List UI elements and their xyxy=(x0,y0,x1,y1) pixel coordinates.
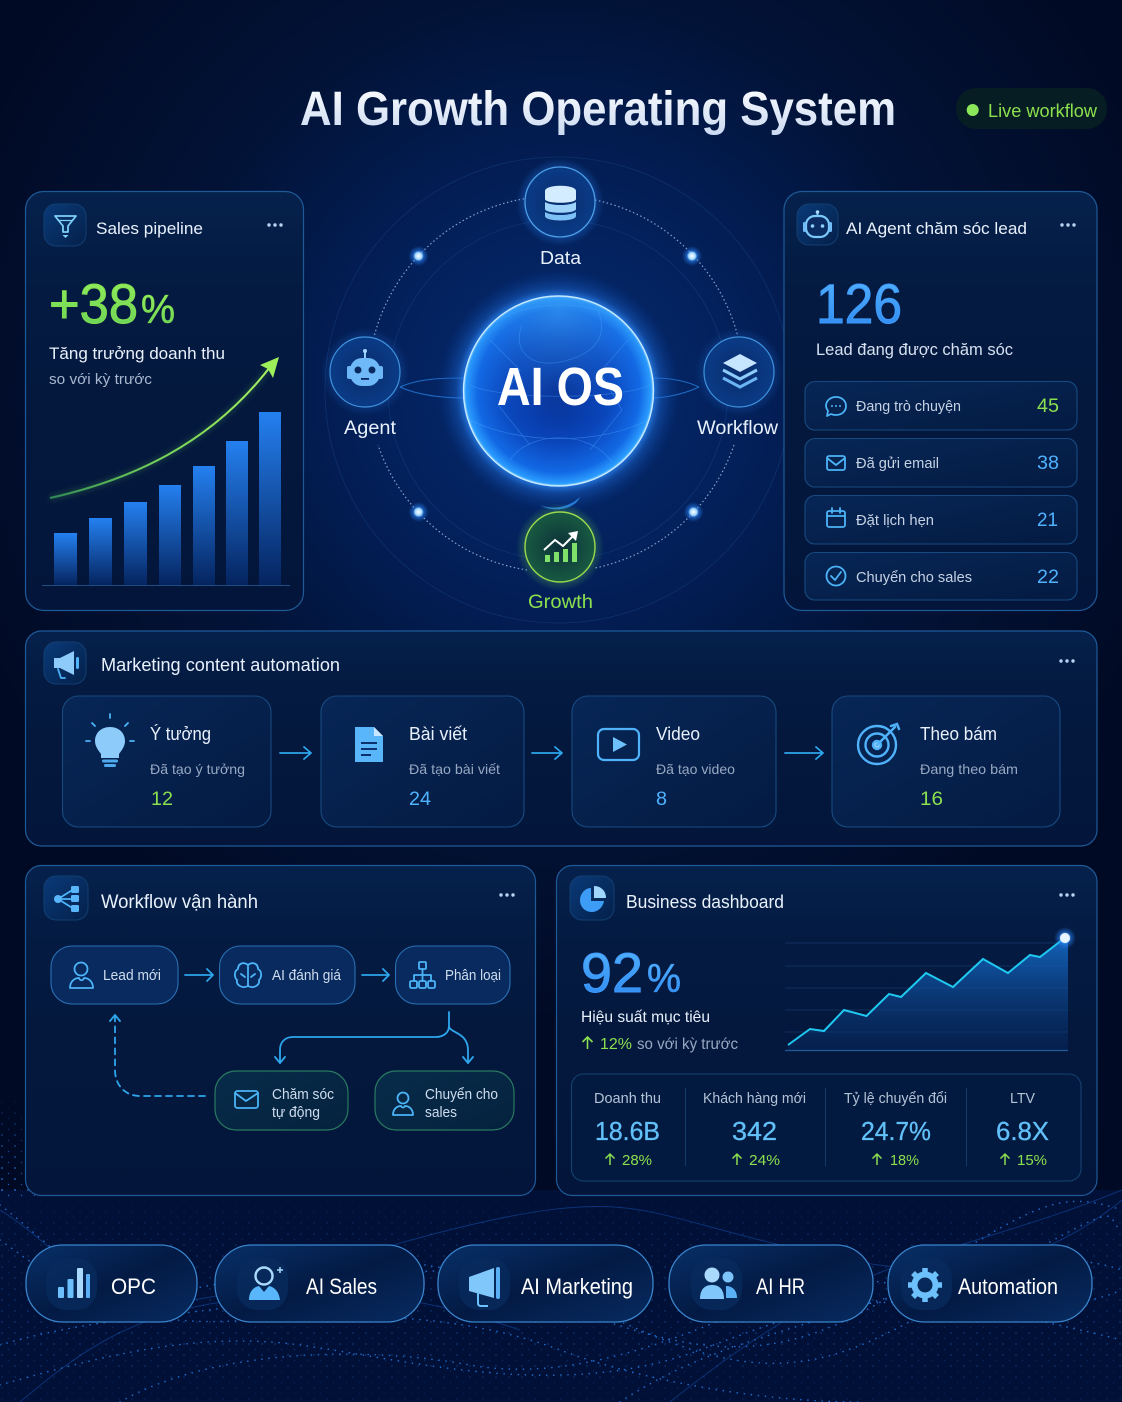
stat: LTV: LTV xyxy=(1010,1091,1035,1107)
step: idea: Đã tạo ý tưởng xyxy=(150,761,245,777)
lead count: 126 xyxy=(816,272,902,335)
icon: funnel xyxy=(44,204,86,246)
pill: OPC: OPC xyxy=(111,1274,156,1299)
stat: conversion rate: Tỷ lệ chuyển đổi xyxy=(844,1091,947,1107)
branching arrows xyxy=(275,1012,473,1063)
arrow xyxy=(785,747,823,759)
growth value: +38 xyxy=(49,272,138,335)
stat: revenue: Doanh thu xyxy=(594,1091,661,1107)
icon: growth chart xyxy=(544,531,578,562)
stat: LTV xyxy=(996,1091,1049,1169)
pill: AI Marketing xyxy=(438,1245,653,1322)
icon: megaphone xyxy=(44,642,86,684)
pill: AI HR xyxy=(669,1245,873,1322)
pill: Automation xyxy=(888,1245,1092,1322)
icon: robot xyxy=(797,204,838,245)
step: video: Đã tạo video xyxy=(656,761,735,777)
node: to sales: sales xyxy=(425,1105,457,1121)
stat: revenue: 28% xyxy=(622,1153,652,1169)
node: growth xyxy=(516,503,604,613)
row: appointment xyxy=(805,496,1077,544)
node: to sales: Chuyển cho xyxy=(425,1087,498,1103)
dotted ring xyxy=(374,199,738,570)
area chart xyxy=(785,927,1076,1050)
step: tracking: 16 xyxy=(920,789,943,810)
step: idea: 12 xyxy=(151,789,173,810)
row: appointment: Đặt lịch hẹn xyxy=(856,512,934,529)
stat: LTV: 6.8X xyxy=(996,1116,1049,1146)
KPI: % xyxy=(647,957,681,1001)
icon: pie chart xyxy=(570,876,614,920)
icon: bars xyxy=(58,1268,90,1298)
node: growth: Growth xyxy=(528,592,593,613)
stat: conversion rate xyxy=(844,1091,947,1169)
node: agent xyxy=(321,328,409,439)
step: tracking: Theo bám xyxy=(920,724,997,744)
growth caption: Tăng trưởng doanh thu xyxy=(49,344,225,363)
live workflow badge: Live workflow xyxy=(988,101,1098,121)
stat: revenue xyxy=(594,1091,661,1169)
orbit nodes sparks xyxy=(408,246,704,522)
row: appointment: 21 xyxy=(1037,510,1058,531)
panel heading: Business dashboard xyxy=(626,892,784,912)
row: hand to sales: Chuyển cho sales xyxy=(856,569,972,586)
stat: new customers: 24% xyxy=(749,1153,780,1169)
panel heading: Sales pipeline xyxy=(96,219,203,238)
node: classify: Phân loại xyxy=(445,968,501,984)
node: data xyxy=(516,158,604,268)
step: article: 24 xyxy=(409,789,431,810)
icon: people xyxy=(700,1268,737,1299)
stats box xyxy=(572,1074,1081,1181)
row: chatting: 45 xyxy=(1037,396,1059,417)
lead count: Lead đang được chăm sóc xyxy=(816,340,1013,359)
step: article: Đã tạo bài viết xyxy=(409,761,500,777)
growth value: % xyxy=(141,288,175,332)
live workflow badge xyxy=(956,88,1107,129)
row: email: 38 xyxy=(1037,453,1059,474)
bar chart xyxy=(42,412,290,586)
KPI: so với kỳ trước xyxy=(637,1036,738,1053)
node: workflow: Workflow xyxy=(697,418,778,439)
panel: workflow operations xyxy=(26,866,536,1196)
node: classify xyxy=(396,946,510,1004)
panel heading: AI Agent chăm sóc lead xyxy=(846,219,1027,238)
pill: AI Sales: AI Sales xyxy=(306,1274,377,1299)
node: agent: Agent xyxy=(344,418,397,439)
icon: sales person xyxy=(249,1267,283,1300)
growth caption: so với kỳ trước xyxy=(49,371,153,388)
pill: OPC xyxy=(26,1245,197,1322)
node: auto care: tự động xyxy=(272,1105,320,1121)
KPI: 92 xyxy=(581,941,643,1004)
icon: target xyxy=(858,724,899,764)
node: to sales xyxy=(375,1071,514,1130)
arrow xyxy=(185,969,213,981)
orbit diagram xyxy=(321,157,791,623)
node: AI evaluation xyxy=(220,946,355,1004)
node: auto care: Chăm sóc xyxy=(272,1087,334,1103)
lead count xyxy=(816,272,1013,359)
step: video xyxy=(572,696,776,827)
row: chatting xyxy=(805,382,1077,430)
row: hand to sales: 22 xyxy=(1037,567,1059,588)
KPI: Hiệu suất mục tiêu xyxy=(581,1009,710,1026)
node: new lead xyxy=(51,946,178,1004)
panel heading: Marketing content automation xyxy=(101,655,340,675)
row: hand to sales xyxy=(805,552,1077,600)
stat: new customers xyxy=(703,1091,806,1169)
icon: layers xyxy=(723,354,757,387)
step: tracking: Đang theo bám xyxy=(920,761,1018,777)
row: email: Đã gửi email xyxy=(856,455,939,472)
title: AI Growth Operating System xyxy=(300,83,896,136)
step: idea xyxy=(62,696,271,827)
icon: hierarchy xyxy=(410,962,435,988)
step: article xyxy=(321,696,524,827)
central sphere: AI OS: AI OS xyxy=(497,357,624,417)
icon: play xyxy=(598,729,639,760)
dashed return arrow xyxy=(110,1015,205,1096)
node: AI evaluation: AI đánh giá xyxy=(272,968,342,984)
arrow xyxy=(280,747,311,759)
panel: sales pipeline xyxy=(26,192,304,610)
arrow xyxy=(362,969,389,981)
icon: document xyxy=(355,727,383,762)
stat: new customers: 342 xyxy=(732,1116,777,1146)
panel: business dashboard xyxy=(556,866,1097,1196)
stat: LTV: 15% xyxy=(1017,1153,1047,1169)
pill: AI HR: AI HR xyxy=(756,1274,805,1299)
panel heading: Workflow vận hành xyxy=(101,892,258,913)
arrow xyxy=(532,747,562,759)
step: video: 8 xyxy=(656,789,667,810)
icon: brain xyxy=(235,963,261,987)
pill: AI Marketing: AI Marketing xyxy=(521,1274,633,1299)
step: idea: Ý tưởng xyxy=(150,724,211,744)
node: auto care xyxy=(215,1071,348,1130)
icon: megaphone xyxy=(469,1267,500,1306)
KPI: 12% xyxy=(600,1036,632,1053)
stat: conversion rate: 18% xyxy=(890,1153,919,1169)
ring connectors xyxy=(400,378,699,398)
growth arrow xyxy=(50,357,279,498)
step: article: Bài viết xyxy=(409,724,467,744)
KPI xyxy=(581,941,738,1053)
row: email xyxy=(805,438,1077,487)
row: chatting: Đang trò chuyện xyxy=(856,398,961,415)
icon: share network xyxy=(44,876,88,920)
step: video: Video xyxy=(656,724,700,744)
stat: new customers: Khách hàng mới xyxy=(703,1091,806,1107)
icon: robot xyxy=(347,349,383,386)
stat: revenue: 18.6B xyxy=(595,1116,660,1146)
icon: light bulb xyxy=(86,714,134,767)
step: tracking xyxy=(832,696,1060,827)
pill: Automation: Automation xyxy=(958,1274,1058,1299)
node: data: Data xyxy=(540,248,582,268)
panel: marketing content automation xyxy=(26,631,1097,846)
icon: gear xyxy=(908,1268,942,1302)
icon: database xyxy=(545,186,576,220)
node: new lead: Lead mới xyxy=(103,968,161,984)
stat: conversion rate: 24.7% xyxy=(861,1116,931,1146)
central sphere: AI OS xyxy=(436,269,680,513)
panel: AI agent lead care xyxy=(784,192,1097,610)
node: workflow xyxy=(695,328,783,439)
pill: AI Sales xyxy=(215,1245,424,1322)
growth caption xyxy=(49,344,225,388)
